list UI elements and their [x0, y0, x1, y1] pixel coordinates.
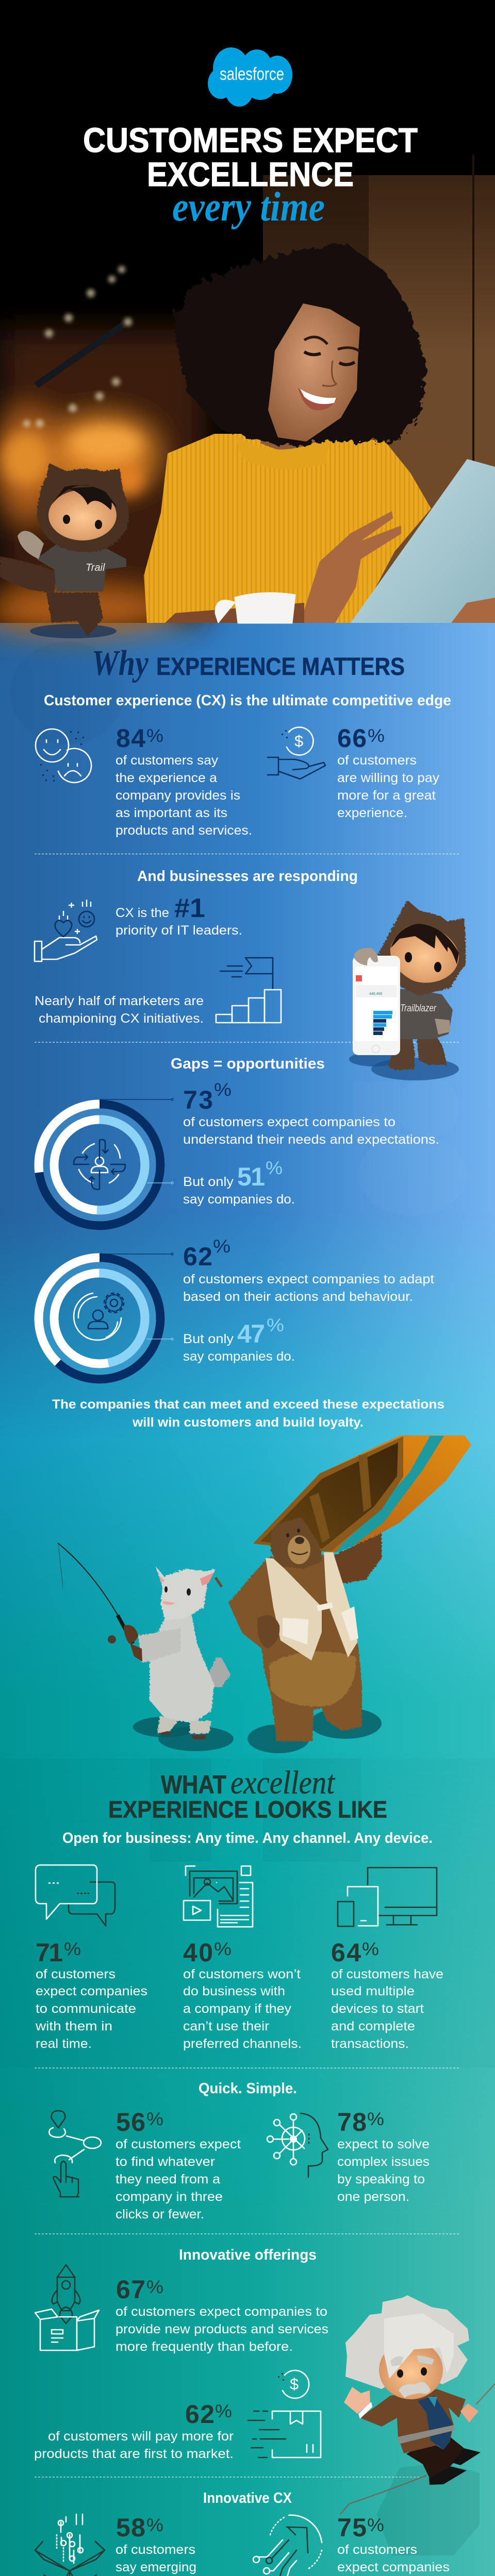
stat: 62 percent adapt: 62 [183, 1242, 212, 1271]
stat: 56 percent: to find whatever [116, 2155, 215, 2169]
stat: 66 percent: % [368, 726, 385, 746]
icon: box with circuits [35, 2514, 105, 2576]
icon: pin route and tap [49, 2111, 101, 2197]
stat: 47 percent: say companies do. [183, 1349, 295, 1364]
heading: why experience matters: EXPERIENCE MATTERS [156, 653, 405, 681]
stat: 58 percent: 58 [116, 2513, 145, 2542]
title: CUSTOMERS EXPECT [83, 121, 418, 160]
icon: person with cycle arrows [74, 1140, 125, 1190]
stat: 58 percent: of customers [116, 2543, 195, 2557]
stat: 64 percent: of customers have [331, 1967, 443, 1981]
stat: 66 percent: experience. [337, 806, 407, 820]
stat: 40 percent: 40 [183, 1938, 213, 1967]
stat: 71 percent: expect companies [36, 1984, 147, 1998]
heading: what excellent experience looks like: excellent [230, 1764, 336, 1801]
stat: 62 percent first to market: products that are first to market. [34, 2447, 234, 2461]
stat: 64 percent: used multiple [331, 1984, 415, 1998]
stat: 78 percent: % [367, 2109, 384, 2129]
stat: 84 percent: as important as its [116, 806, 227, 820]
stat: 64 percent: % [362, 1939, 379, 1959]
stat: 67 percent: provide new products and services [116, 2322, 328, 2336]
icon: hand with heart and smile [35, 900, 97, 961]
stat: 40 percent [183, 1938, 302, 2051]
stat: 56 percent: % [146, 2109, 163, 2129]
stat: 40 percent: of customers won’t [183, 1967, 301, 1981]
stat: 75 percent: expect companies [337, 2560, 450, 2574]
stat: 64 percent: 64 [331, 1938, 361, 1967]
stat: 67 percent [116, 2275, 328, 2354]
icon: hand holding dollar: $ [294, 732, 303, 750]
stat: 58 percent: say emerging [116, 2560, 196, 2574]
stat: 56 percent: 56 [116, 2108, 145, 2137]
text: win customers and build loyalty: The companies that can meet and exceed these expectations [52, 1397, 444, 1412]
woman's collar [235, 435, 330, 469]
stat: 64 percent: devices to start [331, 2002, 424, 2016]
coffee cup [216, 593, 295, 623]
stat: 75 percent: % [367, 2515, 384, 2535]
faint reflection of goat and bear [150, 1758, 361, 1861]
stat: CX is number one: #1 [174, 893, 205, 923]
stat: 56 percent: of customers expect [116, 2137, 241, 2151]
icon: upward arrow circuits [253, 2515, 322, 2576]
stat: 62 percent first to market: of customers will pay more for [48, 2429, 234, 2444]
stat: 51 percent: % [266, 1158, 283, 1178]
stat: 56 percent: clicks or fewer. [116, 2207, 204, 2222]
stat: 40 percent: a company if they [183, 2002, 292, 2016]
stat: CX is number one [116, 893, 242, 938]
stat: 62 percent first to market: 62 [185, 2400, 214, 2429]
stat: 47 percent: But only [183, 1332, 234, 1346]
title: every time [172, 184, 325, 230]
stat: 71 percent: 71 [36, 1938, 63, 1967]
stat: 75 percent: of customers [337, 2543, 417, 2557]
stat: 84 percent: % [146, 726, 163, 746]
icon: hand holding dollar [268, 727, 325, 779]
stat: 66 percent: more for a great [337, 788, 436, 803]
stat: 51 percent: But only [183, 1175, 234, 1189]
stat: 71 percent: with them in [35, 2019, 112, 2033]
stat: 62 percent adapt: % [213, 1236, 230, 1257]
stat: 84 percent: 84 [116, 724, 145, 753]
stat: 78 percent: complex issues [337, 2155, 430, 2169]
stat: 58 percent [116, 2513, 217, 2576]
stat: 67 percent: % [146, 2277, 163, 2297]
text: marketers championing CX: championing CX initiatives. [39, 1011, 204, 1026]
icon: devices [338, 1868, 437, 1926]
tablet [351, 459, 495, 623]
donut chart: 73 and 51 percent [39, 1098, 173, 1226]
heading: what excellent experience looks like: EXPERIENCE LOOKS LIKE [108, 1796, 387, 1823]
stat: 78 percent: one person. [337, 2190, 409, 2204]
woman's neck [260, 407, 330, 453]
hero photo: woman with tablet in a cafe [0, 0, 495, 634]
woman's sweater [144, 434, 431, 623]
woman's face [268, 303, 360, 442]
stat: 62 percent first to market [34, 2400, 234, 2461]
character: Astro holding phone: Trailblazer [400, 1003, 437, 1014]
stat: 62 percent adapt [183, 1236, 434, 1304]
stat: 71 percent: of customers [36, 1967, 116, 1981]
faint reflection of Einstein [376, 2463, 480, 2555]
icon: head with network [267, 2113, 328, 2177]
stat: 47 percent: % [267, 1315, 284, 1335]
stat: CX is number one: CX is the [116, 906, 169, 920]
stat: 51 percent: 51 [237, 1162, 265, 1191]
stat: 84 percent: products and services. [116, 823, 252, 838]
heading: what excellent experience looks like: WHAT [161, 1770, 226, 1799]
stat: 56 percent: they need from a [116, 2172, 220, 2187]
subheading: quick simple: Quick. Simple. [199, 2080, 297, 2097]
character: small Astro in hero [0, 463, 129, 638]
salesforce logo: salesforce [220, 64, 284, 84]
icon: steps with flag [216, 958, 281, 1023]
stat: 66 percent: are willing to pay [337, 771, 440, 785]
text: win customers and build loyalty: will win customers and build loyalty. [132, 1415, 364, 1430]
icon: media content [184, 1866, 253, 1927]
stat: 56 percent: company in three [116, 2190, 223, 2204]
page background [0, 623, 495, 2576]
subheading: businesses responding: And businesses are responding [137, 868, 358, 885]
stat: 62 percent first to market: % [215, 2401, 232, 2421]
subheading: innovative offerings: Innovative offerings [179, 2247, 317, 2263]
stat: 71 percent: real time. [36, 2037, 92, 2051]
stat: 84 percent [116, 724, 252, 838]
character: Astro holding phone: 448,400 [369, 992, 382, 996]
salesforce logo [208, 47, 292, 107]
icon: dollar and fast parcel: $ [290, 2375, 299, 2393]
character: goat with fishing rod [58, 1543, 234, 1751]
stat: 56 percent [116, 2108, 241, 2222]
stat: 40 percent: can’t use their [183, 2019, 269, 2033]
icon: dollar and fast parcel [248, 2370, 321, 2458]
title: EXCELLENCE [147, 155, 354, 193]
stat: 78 percent: 78 [337, 2108, 367, 2137]
stat: 67 percent: of customers expect companies to [116, 2304, 327, 2319]
subheading: gaps: Gaps = opportunities [171, 1056, 325, 1072]
stat: 71 percent: % [64, 1939, 81, 1959]
stat: 67 percent: more frequently than before. [116, 2340, 293, 2354]
icon: smiley and sad faces [36, 729, 91, 783]
woman's hair [174, 244, 426, 446]
text: win customers and build loyalty [52, 1397, 444, 1430]
donut chart: 62 and 47 percent [39, 1253, 173, 1379]
icon: rocket from box [35, 2265, 99, 2350]
stat: 66 percent: 66 [337, 724, 367, 753]
stat: 47 percent [183, 1315, 295, 1364]
subheading: open for business: Open for business: Any time. Any channel. Any device. [62, 1830, 433, 1846]
stat: 66 percent: of customers [337, 753, 417, 768]
stat: 73 percent [183, 1080, 439, 1147]
stat: 64 percent [331, 1938, 443, 2051]
stat: 78 percent: expect to solve [337, 2137, 430, 2151]
stat: 40 percent: preferred channels. [183, 2037, 302, 2051]
stat: 58 percent: % [146, 2515, 163, 2535]
icon: chat bubbles [36, 1865, 115, 1926]
stat: 71 percent: to communicate [36, 2002, 136, 2016]
title [83, 121, 418, 230]
subheading: innovative CX: Innovative CX [203, 2490, 292, 2506]
stat: 62 percent adapt: based on their actions and behaviour. [183, 1290, 413, 1304]
character: small Astro in hero: Trail [86, 562, 105, 573]
text: marketers championing CX [35, 994, 204, 1026]
stat: 66 percent [337, 724, 440, 820]
stat: 47 percent: 47 [237, 1319, 265, 1348]
canoe [253, 1435, 471, 1552]
character: Astro holding phone [349, 900, 466, 1080]
heading: why experience matters [92, 643, 405, 683]
stat: 73 percent: of customers expect companies to [183, 1115, 395, 1129]
heading: why experience matters: Why [92, 643, 149, 683]
stat: 51 percent [183, 1158, 295, 1207]
subheading: competitive edge: Customer experience (CX) is the ultimate competitive edge [44, 692, 451, 709]
faint reflection of small Astro [10, 641, 124, 744]
faint reflection of large Astro [354, 1077, 467, 1216]
icon: person with gear [74, 1293, 124, 1340]
stat: 67 percent: 67 [116, 2275, 145, 2304]
stat: 84 percent: the experience a [116, 771, 217, 785]
stat: 75 percent [337, 2513, 450, 2576]
stat: 40 percent: do business with [183, 1984, 285, 1998]
text: marketers championing CX: Nearly half of marketers are [35, 994, 204, 1008]
heading: what excellent experience looks like [108, 1764, 387, 1823]
stat: 78 percent [337, 2108, 430, 2204]
stat: 73 percent: % [214, 1080, 232, 1100]
character: bear carrying canoe [228, 1435, 471, 1753]
stat: 73 percent: understand their needs and expectations. [183, 1132, 439, 1147]
stat: 51 percent: say companies do. [183, 1192, 295, 1207]
stat: 62 percent adapt: of customers expect companies to adapt [183, 1272, 434, 1286]
woman's hand [300, 511, 401, 623]
stat: 78 percent: by speaking to [337, 2172, 425, 2187]
stat: CX is number one: priority of IT leaders. [116, 923, 242, 938]
character: Einstein on rope [340, 2295, 495, 2514]
stat: 64 percent: and complete [331, 2019, 415, 2033]
stat: 71 percent [35, 1938, 147, 2051]
stat: 84 percent: of customers say [116, 753, 219, 768]
stat: 84 percent: company provides is [116, 788, 240, 803]
stat: 75 percent: 75 [337, 2513, 367, 2542]
stat: 73 percent: 73 [183, 1086, 213, 1114]
stat: 40 percent: % [214, 1939, 232, 1959]
stat: 64 percent: transactions. [331, 2037, 409, 2051]
